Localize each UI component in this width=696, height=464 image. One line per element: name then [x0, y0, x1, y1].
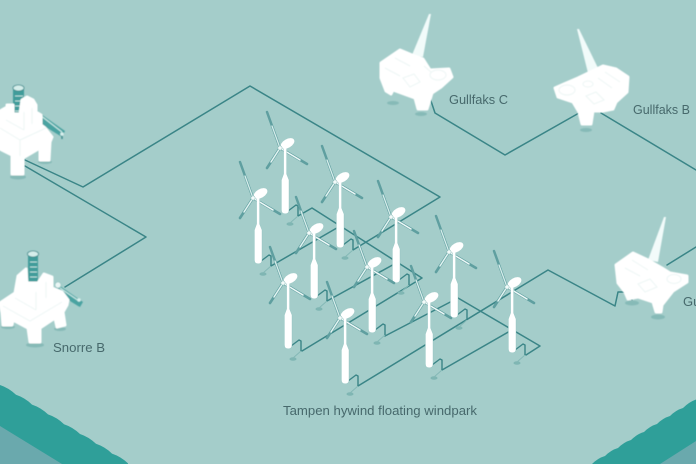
wind turbine 6 [436, 216, 476, 330]
left shoreline [0, 385, 128, 464]
wind turbine 7 [354, 231, 394, 345]
label: Tampen hywind floating windpark: Tampen hywind floating windpark [283, 403, 478, 418]
wind turbine 5 [296, 197, 336, 311]
platform: Snorre A [0, 85, 65, 180]
platform: Gullfaks B [555, 29, 628, 132]
label: Gullfaks B: Gullfaks B [633, 102, 690, 117]
right shoreline [592, 400, 696, 464]
platform: Snorre B [0, 251, 83, 348]
wind turbine 10 [411, 266, 451, 380]
wind turbine 3 [322, 146, 362, 260]
wind turbine 8 [270, 247, 310, 361]
wind turbine 1 [267, 112, 307, 226]
label: Snorre B: Snorre B [53, 340, 105, 355]
wind turbine 2 [240, 162, 280, 276]
platform: Gullfaks A [616, 217, 687, 320]
label: Gullfaks C: Gullfaks C [449, 92, 508, 107]
subsea power cables [25, 86, 696, 386]
platform: Gullfaks C [381, 14, 452, 116]
wind turbine 11 [327, 282, 367, 396]
wind turbine 4 [378, 181, 418, 295]
wind turbine 9 [494, 251, 534, 365]
